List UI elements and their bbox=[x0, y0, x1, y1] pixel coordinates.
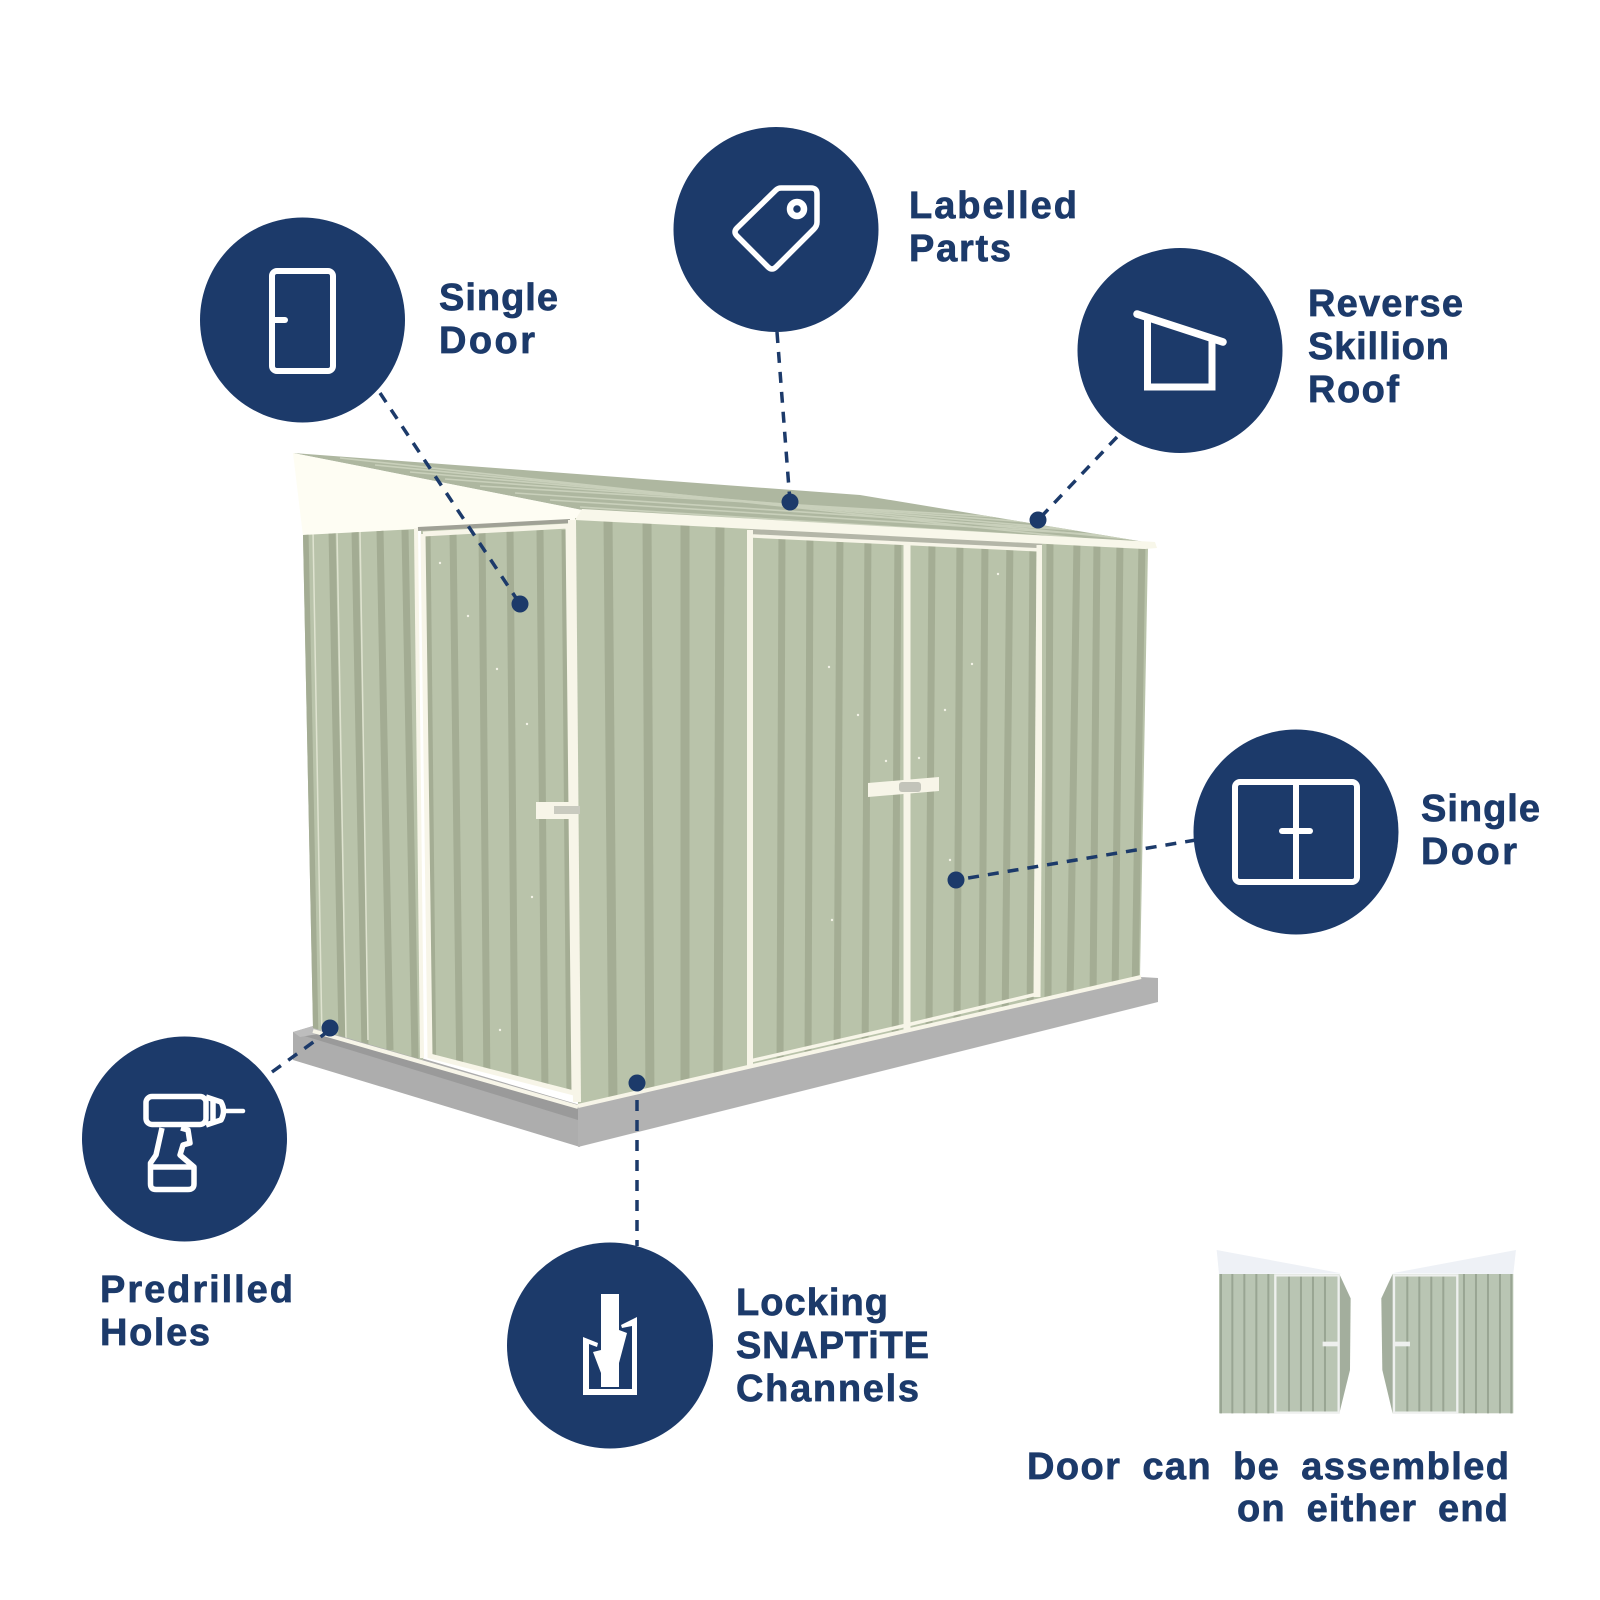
icon: snaptite channel bbox=[507, 1242, 713, 1448]
heading: double door callout: Single bbox=[1421, 788, 1540, 830]
caption: door can be assembled on either end bbox=[1027, 1446, 1509, 1530]
callout: double door leader bbox=[948, 840, 1196, 888]
caption: door can be assembled on either end: on either end bbox=[1237, 1488, 1508, 1530]
heading: single door: Single bbox=[439, 277, 558, 319]
heading: predrilled holes: Holes bbox=[100, 1312, 210, 1354]
single door panel bbox=[416, 521, 575, 1095]
right wall bbox=[1042, 540, 1148, 1000]
heading: single door bbox=[439, 277, 558, 362]
door handle: double door bbox=[868, 777, 939, 797]
caption: door can be assembled on either end: Door can be assembled bbox=[1027, 1446, 1509, 1488]
front wall bbox=[575, 518, 750, 1105]
shed illustration bbox=[293, 453, 1158, 1147]
callout: predrilled holes leader bbox=[272, 1020, 338, 1072]
rivets bbox=[439, 562, 999, 1031]
callout: labelled parts leader bbox=[777, 332, 798, 510]
concrete slab bbox=[293, 977, 1158, 1147]
heading: reverse skillion roof bbox=[1308, 283, 1463, 411]
heading: single door: Door bbox=[439, 320, 535, 362]
heading: locking snaptite channels bbox=[736, 1282, 929, 1410]
heading: predrilled holes bbox=[100, 1269, 293, 1354]
heading: locking snaptite channels: Locking bbox=[736, 1282, 888, 1324]
door handle: single door bbox=[536, 802, 580, 819]
heading: labelled parts: Labelled bbox=[909, 185, 1077, 227]
icon: drill bbox=[82, 1036, 287, 1242]
heading: locking snaptite channels: Channels bbox=[736, 1368, 919, 1410]
left wall bbox=[303, 529, 423, 1060]
corner post and sill trims bbox=[313, 520, 1141, 1107]
callout: roof leader bbox=[1030, 437, 1117, 528]
heading: reverse skillion roof: Roof bbox=[1308, 369, 1399, 411]
small shed: door on left end bbox=[1381, 1250, 1516, 1413]
icon: double door bbox=[1194, 730, 1398, 934]
heading: double door callout bbox=[1421, 788, 1540, 873]
heading: reverse skillion roof: Skillion bbox=[1308, 326, 1449, 368]
heading: double door callout: Door bbox=[1421, 831, 1517, 873]
icon: single door bbox=[200, 218, 405, 422]
heading: reverse skillion roof: Reverse bbox=[1308, 283, 1463, 325]
callout: channels leader bbox=[628, 1074, 646, 1246]
heading: labelled parts bbox=[909, 185, 1077, 270]
heading: predrilled holes: Predrilled bbox=[100, 1269, 293, 1311]
heading: labelled parts: Parts bbox=[909, 228, 1011, 270]
gable end bbox=[293, 453, 582, 536]
callout: single door leader bbox=[380, 393, 528, 612]
heading: locking snaptite channels: SNAPTiTE bbox=[736, 1325, 929, 1367]
roof fascia bbox=[575, 509, 1157, 549]
icon: tag bbox=[674, 127, 878, 332]
small shed: door on right end bbox=[1217, 1250, 1351, 1413]
double door panels bbox=[750, 526, 1042, 1067]
roof bbox=[293, 453, 1150, 546]
icon: reverse skillion roof bbox=[1078, 248, 1282, 453]
